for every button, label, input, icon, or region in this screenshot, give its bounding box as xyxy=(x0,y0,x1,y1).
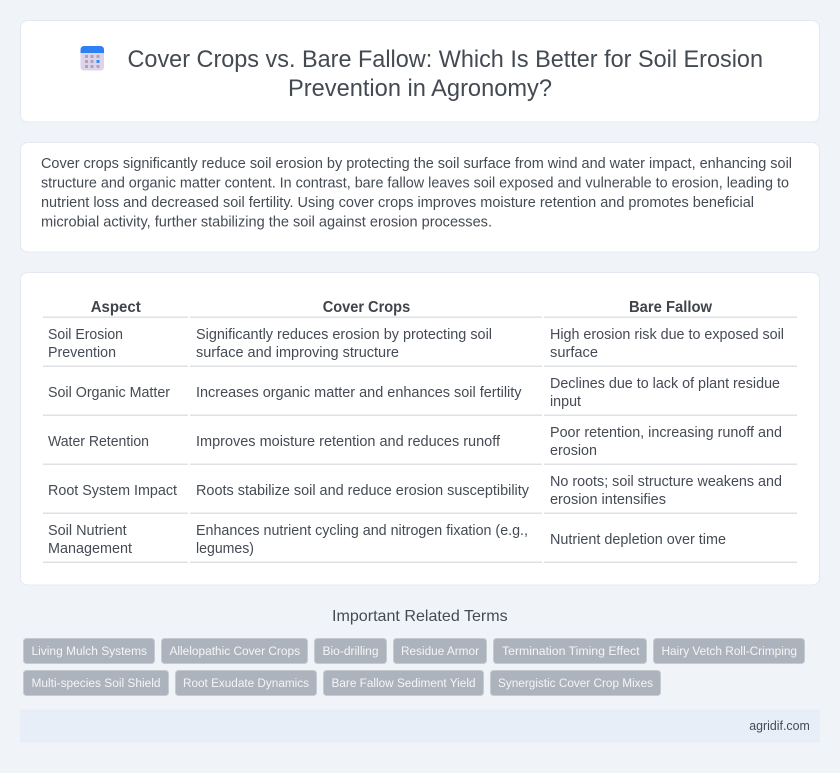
row: soil nutrient management: Soil Nutrient xyxy=(48,523,127,539)
tag: bare fallow sediment yield: Bare Fallow Sediment Yield xyxy=(332,676,476,690)
row: root system impact: Root System Impact xyxy=(48,483,177,499)
tag: root exudate dynamics xyxy=(176,670,316,696)
tag: synergistic cover crop mixes xyxy=(490,670,660,696)
table header row xyxy=(91,299,713,316)
tag list xyxy=(24,638,804,696)
tag: root exudate dynamics: Root Exudate Dynamics xyxy=(183,676,309,690)
tag: living mulch systems xyxy=(24,638,154,664)
row: soil nutrient management: Enhances nutrient cycling and nitrogen fixation (e.g., xyxy=(196,523,528,539)
tag: multi-species soil shield: Multi-species Soil Shield xyxy=(32,676,160,690)
footer bar: agridif.com xyxy=(749,718,810,733)
row: soil organic matter xyxy=(48,376,780,410)
row: soil erosion prevention: High erosion risk due to exposed soil xyxy=(550,327,784,343)
row: water retention: erosion xyxy=(550,443,597,459)
table header row: Aspect xyxy=(91,299,141,316)
title: Cover Crops vs. Bare Fallow: Which Is Better for Soil Erosion xyxy=(128,46,763,73)
row: soil erosion prevention: surface xyxy=(550,345,598,361)
tag: allelopathic cover crops: Allelopathic Cover Crops xyxy=(170,644,300,658)
tag: hairy vetch roll-crimping: Hairy Vetch Roll-Crimping xyxy=(662,644,797,658)
row: soil organic matter: Declines due to lack of plant residue xyxy=(550,376,780,392)
heading: important related terms: Important Related Terms xyxy=(332,608,508,625)
row: soil erosion prevention xyxy=(48,327,784,361)
row: soil nutrient management xyxy=(48,523,726,557)
summary paragraph: nutrient loss and decreased soil fertility. Using cover crops improves moisture retention and promotes beneficial xyxy=(41,195,754,211)
tag: allelopathic cover crops xyxy=(162,638,308,664)
table header row: Bare Fallow xyxy=(629,299,713,316)
row: soil nutrient management: legumes) xyxy=(196,541,254,557)
tag: multi-species soil shield xyxy=(24,670,168,696)
tag: termination timing effect xyxy=(494,638,646,664)
panel: comparison table xyxy=(20,272,820,585)
tag: synergistic cover crop mixes: Synergistic Cover Crop Mixes xyxy=(498,676,653,690)
summary paragraph: structure and organic matter content. In contrast, bare fallow leaves soil exposed and vulnerable to erosion, leading to xyxy=(41,176,789,192)
row: root system impact: erosion intensifies xyxy=(550,492,666,508)
row: soil organic matter: Increases organic matter and enhances soil fertility xyxy=(196,385,522,401)
summary paragraph: microbial activity, further stabilizing the soil against erosion processes. xyxy=(41,214,492,230)
row: soil erosion prevention: surface and improving structure xyxy=(196,345,399,361)
tag: residue armor xyxy=(394,638,486,664)
summary paragraph: Cover crops significantly reduce soil erosion by protecting the soil surface from wind and water impact, enhancing soil xyxy=(41,156,792,172)
tag: residue armor: Residue Armor xyxy=(401,644,479,658)
row: water retention: Water Retention xyxy=(48,434,149,450)
panel: summary xyxy=(20,142,820,252)
row: water retention: Improves moisture retention and reduces runoff xyxy=(196,434,501,450)
row: soil erosion prevention: Prevention xyxy=(48,345,116,361)
title: Prevention in Agronomy? xyxy=(288,75,552,102)
icon: calendar xyxy=(80,46,104,70)
tag: bio-drilling: Bio-drilling xyxy=(322,644,378,658)
title xyxy=(128,46,763,102)
tag: bare fallow sediment yield xyxy=(324,670,484,696)
row: root system impact: Roots stabilize soil and reduce erosion susceptibility xyxy=(196,483,530,499)
table rules xyxy=(43,316,797,563)
row: water retention xyxy=(48,425,782,459)
table header row: Cover Crops xyxy=(323,299,410,316)
row: soil nutrient management: Nutrient depletion over time xyxy=(550,532,726,548)
row: soil erosion prevention: Soil Erosion xyxy=(48,327,123,343)
row: soil erosion prevention: Significantly reduces erosion by protecting soil xyxy=(196,327,492,343)
tag: bio-drilling xyxy=(314,638,386,664)
row: soil organic matter: input xyxy=(550,394,581,410)
tag: living mulch systems: Living Mulch Systems xyxy=(32,644,147,658)
footer bar xyxy=(20,710,820,742)
tag: termination timing effect: Termination Timing Effect xyxy=(502,644,640,658)
row: root system impact: No roots; soil structure weakens and xyxy=(550,474,782,490)
row: water retention: Poor retention, increasing runoff and xyxy=(550,425,782,441)
tag: hairy vetch roll-crimping xyxy=(654,638,804,664)
row: soil nutrient management: Management xyxy=(48,541,132,557)
row: soil organic matter: Soil Organic Matter xyxy=(48,385,170,401)
summary paragraph xyxy=(41,156,792,230)
panel: title header xyxy=(20,20,820,122)
row: root system impact xyxy=(48,474,782,508)
